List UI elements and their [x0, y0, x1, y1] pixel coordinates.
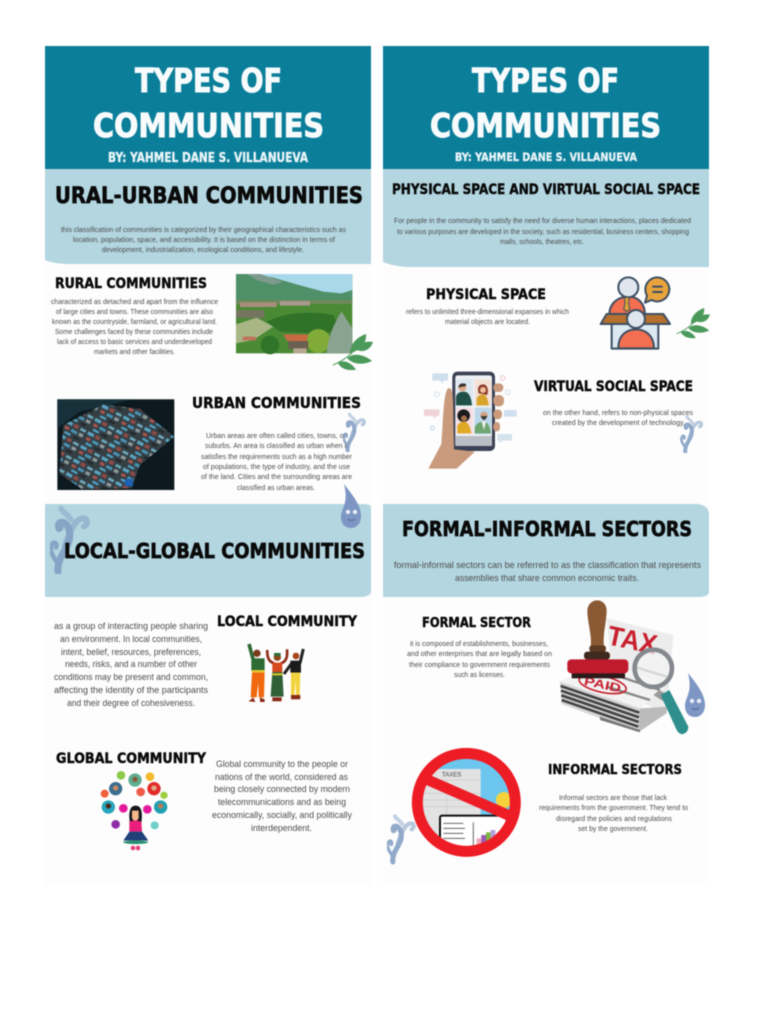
informal sector text: requirements from the government. They tend to [539, 803, 688, 812]
local community text: and their degree of cohesiveness. [67, 697, 195, 708]
panel: local community [54, 614, 358, 708]
heading: informal sectors: INFORMAL SECTORS [548, 762, 682, 778]
local community text: needs, risks, and a number of other [65, 658, 197, 669]
rural text [51, 297, 218, 356]
left title banner [45, 46, 371, 169]
panel: physical space [406, 277, 710, 349]
icon: blue swirl [343, 414, 364, 450]
heading: rural-urban communities: URAL-URBAN COMMUNITIES [55, 184, 363, 209]
virtual space text: on the other hand, refers to non-physical spaces [543, 408, 693, 417]
local community text [54, 620, 208, 708]
intro text: to various purposes are developed in the society, such as residential, business centers, shopping [397, 227, 689, 236]
photo: rural mountain town [236, 274, 352, 354]
informal sector text: Informal sectors are those that lack [559, 793, 667, 802]
rural text: of large cities and towns. These communities are also [56, 307, 213, 316]
right title banner [383, 46, 709, 169]
icon: blue swirl [388, 816, 414, 862]
rural text: characterized as detached and apart from the influence [51, 297, 218, 306]
formal sector text: such as licenses. [454, 670, 505, 679]
informal sector text: disregard the policies and regulations [556, 814, 672, 823]
local community text: as a group of interacting people sharing [54, 620, 208, 631]
formal sector text: it is composed of establishments, businesses, [410, 639, 548, 648]
physical space text: refers to unlimited three-dimensional expanses in which [406, 307, 569, 316]
title: types of communities [93, 61, 324, 145]
intro text: this classification of communities is categorized by their geographical characteristics such as [61, 225, 346, 234]
urban text: suburbs. An area is classified as urban when it [205, 441, 349, 450]
panel: rural-urban communities intro [45, 169, 371, 264]
heading: physical space and virtual social space: PHYSICAL SPACE AND VIRTUAL SOCIAL SPACE [392, 182, 700, 198]
panel: virtual social space [424, 372, 701, 469]
icon: no taxes sign [410, 745, 523, 858]
panel: global community [56, 751, 352, 850]
informal sector text: set by the government. [578, 824, 648, 833]
panel: formal-informal sectors banner [383, 504, 709, 597]
urban text: classified as urban areas. [237, 483, 315, 492]
heading: global community: GLOBAL COMMUNITY [56, 751, 207, 767]
informal sector text [539, 793, 688, 833]
sectors intro text: formal-informal sectors can be referred to as the classification that represents [394, 559, 701, 570]
icon: three people raising hands [249, 644, 303, 702]
formal sector text: their compliance to government requirements [409, 660, 550, 669]
icon: blue swirl [681, 417, 701, 452]
icon: green leaf [333, 334, 373, 370]
icon: green leaf [677, 308, 710, 338]
rural text: lack of access to basic services and underdeveloped [57, 337, 212, 346]
intro text: development, industrialization, ecological conditions, and lifestyle. [102, 245, 304, 254]
local community text: an environment. In local communities, [60, 633, 202, 644]
urban text [201, 431, 352, 492]
icon: teacher and student at desk [601, 277, 670, 349]
local community text: conditions may be present and common, [54, 671, 208, 682]
panel background: rural-urban column [45, 264, 371, 885]
author byline: BY: YAHMEL DANE S. VILLANUEVA [108, 150, 308, 166]
global community text: Global community to the people or [216, 758, 348, 769]
virtual space text: created by the development of technology. [552, 418, 685, 427]
local community text: affecting the identity of the participants [54, 684, 208, 695]
panel: urban communities [57, 394, 364, 492]
heading: physical space: PHYSICAL SPACE [426, 287, 546, 303]
urban text: of populations, the type of industry, and the use [203, 462, 350, 471]
sectors intro text: assemblies that share common economic traits. [455, 572, 639, 583]
heading: local-global communities: LOCAL-GLOBAL COMMUNITIES [64, 539, 365, 563]
formal sector text: and other enterprises that are legally based on [407, 649, 552, 658]
global community text: economically, socially, and politically [212, 809, 352, 820]
author byline: BY: YAHMEL DANE S. VILLANUEVA [455, 150, 637, 164]
title: types of communities: COMMUNITIES [93, 106, 324, 145]
panel: rural communities [51, 274, 373, 370]
icon: blue swirl [51, 508, 87, 572]
urban text: Urban areas are often called cities, towns, or [206, 431, 346, 440]
panel: formal sector [407, 600, 705, 734]
title: types of communities: COMMUNITIES [430, 106, 661, 145]
rural text: known as the countryside, farmland, or agricultural land. [52, 317, 217, 326]
physical space text [406, 307, 569, 326]
intro text [394, 216, 691, 246]
icon: tax paper, stamp and magnifier [560, 600, 688, 734]
panel: local-global communities banner [45, 484, 371, 597]
panel background: physical-virtual column [383, 266, 709, 885]
photo: aerial city [57, 399, 174, 490]
sectors intro text [394, 559, 701, 583]
local community text: intent, belief, resources, preferences, [61, 646, 201, 657]
urban text: satisfies the requirements such as a high number [201, 452, 352, 461]
heading: formal sector: FORMAL SECTOR [422, 615, 532, 631]
title: types of communities: TYPES OF [135, 61, 282, 100]
physical space text: material objects are located. [445, 317, 530, 326]
intro text [61, 225, 346, 254]
global community text [212, 758, 352, 833]
heading: formal-informal sectors: FORMAL-INFORMAL SECTORS [402, 517, 692, 541]
panel: informal sectors [388, 745, 688, 862]
title: types of communities: TYPES OF [472, 61, 619, 100]
title: types of communities [430, 61, 661, 145]
icon: no taxes sign: TAXES [442, 773, 461, 779]
heading: local community: LOCAL COMMUNITY [217, 614, 358, 630]
icon: water drop [685, 673, 705, 717]
icon: tax paper, stamp and magnifier: PAID [583, 674, 623, 695]
intro text: location, population, space, and accessibility. It is based on the distinction in terms of [73, 235, 336, 244]
heading: rural communities: RURAL COMMUNITIES [55, 276, 207, 292]
urban text: of the land. Cities and the surrounding areas are [201, 472, 352, 481]
icon: water drop [341, 484, 361, 528]
icon: hand holding phone with video call [424, 372, 517, 469]
panel: physical and virtual space intro [383, 169, 709, 267]
heading: virtual social space: VIRTUAL SOCIAL SPACE [534, 379, 693, 395]
icon: tax paper, stamp and magnifier: TAX [605, 620, 660, 660]
icon: girl surrounded by network avatars [101, 771, 168, 850]
intro text: malls, schools, theatres, etc. [500, 237, 584, 246]
virtual space text [543, 408, 693, 427]
global community text: telecommunications and as being [218, 796, 346, 807]
global community text: nations of the world, considered as [215, 771, 348, 782]
rural text: Some challenges faced by these communities include [55, 327, 213, 336]
global community text: being closely connected by modern [214, 783, 350, 794]
formal sector text [407, 639, 552, 679]
global community text: interdependent. [251, 822, 312, 833]
heading: urban communities: URBAN COMMUNITIES [192, 394, 361, 412]
intro text: For people in the community to satisfy the need for diverse human interactions, places dedicated [394, 216, 691, 225]
rural text: markets and other facilities. [94, 347, 175, 356]
